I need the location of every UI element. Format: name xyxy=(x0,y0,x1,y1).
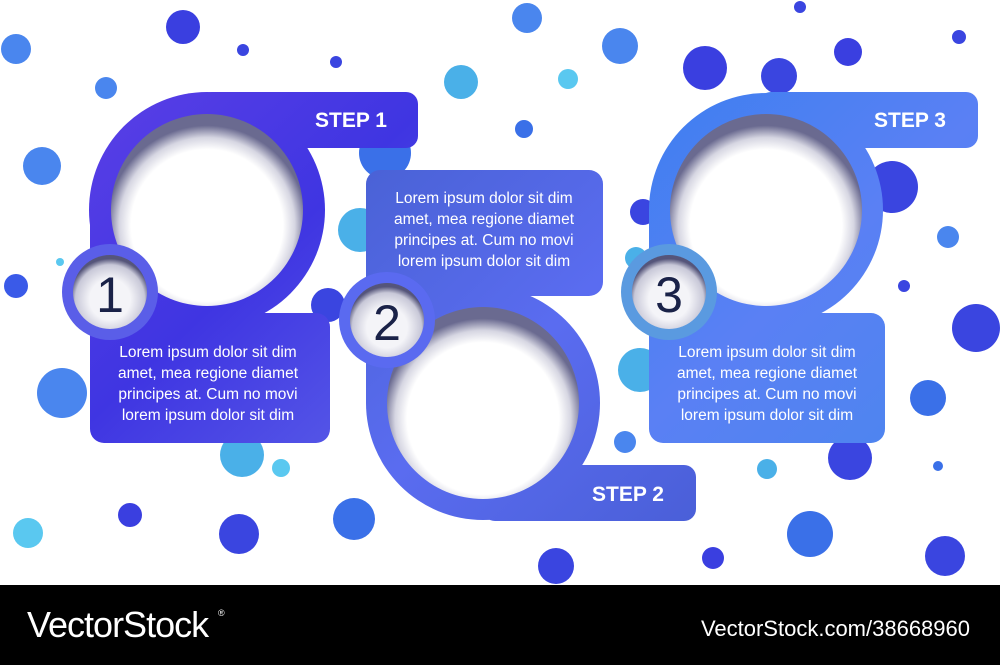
footer: VectorStock xyxy=(27,604,210,645)
text block 2: Lorem ipsum dolor sit dim xyxy=(395,190,573,207)
heading: step 2: STEP 2 xyxy=(592,483,664,506)
footer: VectorStock.com/38668960 xyxy=(701,616,970,641)
panel: step 2 xyxy=(339,170,696,521)
text block 2: lorem ipsum dolor sit dim xyxy=(398,253,570,270)
badge 2: 2 xyxy=(373,295,401,351)
panel: step 3 xyxy=(621,92,978,443)
text block 2: amet, mea regione diamet xyxy=(394,211,575,228)
text block 3: Lorem ipsum dolor sit dim xyxy=(678,344,856,361)
text block 1: amet, mea regione diamet xyxy=(118,365,299,382)
text block 2: principes at. Cum no movi xyxy=(394,232,574,249)
heading: step 3: STEP 3 xyxy=(874,109,946,132)
footer: ® xyxy=(218,608,225,618)
badge 2 xyxy=(339,272,435,368)
text block 1: principes at. Cum no movi xyxy=(118,386,298,403)
panel: step 1 xyxy=(62,92,418,443)
badge 3: 3 xyxy=(655,267,683,323)
footer xyxy=(0,585,1000,665)
text block 3: lorem ipsum dolor sit dim xyxy=(681,407,853,424)
badge 1: 1 xyxy=(96,267,124,323)
badge 3 xyxy=(621,244,717,340)
heading: step 1: STEP 1 xyxy=(315,109,387,132)
text block 3: principes at. Cum no movi xyxy=(677,386,857,403)
text block 1: lorem ipsum dolor sit dim xyxy=(122,407,294,424)
text block 1: Lorem ipsum dolor sit dim xyxy=(119,344,297,361)
badge 1 xyxy=(62,244,158,340)
text block 3: amet, mea regione diamet xyxy=(677,365,858,382)
